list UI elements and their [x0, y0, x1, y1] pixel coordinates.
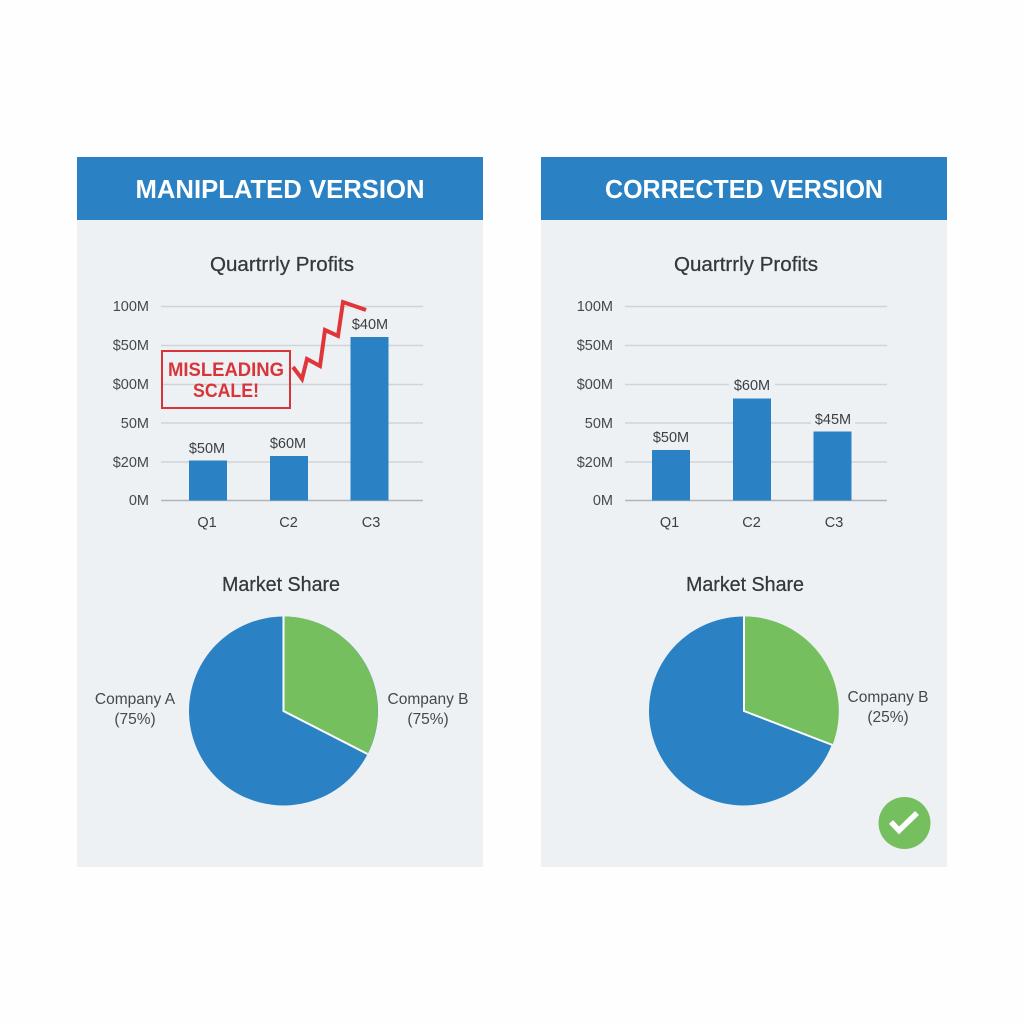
label: company b right: (25%) [867, 709, 909, 726]
bar chart: corrected: $45M [815, 412, 851, 428]
bar chart: manipulated: Q1 [197, 515, 217, 531]
bar chart: manipulated: 100M [113, 299, 149, 315]
bar chart: corrected: Q1 [660, 515, 679, 531]
panel: corrected version [541, 157, 947, 867]
bar chart: corrected [577, 299, 887, 531]
bar chart: manipulated: C3 [362, 515, 380, 531]
chart title: market share right: Market Share [686, 574, 804, 596]
bar chart: manipulated: $40M [352, 317, 388, 333]
bar chart: corrected: 100M [577, 299, 613, 315]
bar chart: corrected: 0M [593, 493, 613, 509]
icon: check mark [878, 797, 930, 849]
bar chart: corrected: 50M [585, 416, 613, 432]
bar chart: corrected: $00M [577, 377, 613, 393]
bar chart: manipulated: $00M [113, 377, 149, 393]
bar chart: corrected: C2 [742, 515, 761, 531]
callout: misleading scale: MISLEADING [168, 360, 284, 381]
bar chart: manipulated: 50M [121, 416, 149, 432]
arrow: jagged red line [293, 302, 366, 379]
panel: manipulated version [77, 157, 483, 867]
bar chart: corrected: $50M [577, 338, 613, 354]
bar chart: corrected: C3 [825, 515, 843, 531]
header: corrected version [541, 157, 947, 220]
bar chart: manipulated: $50M [189, 441, 225, 457]
bar chart: manipulated: $50M [113, 338, 149, 354]
label: company a: (75%) [114, 711, 156, 728]
bar chart: manipulated [113, 299, 423, 531]
bar chart: corrected: $50M [653, 430, 689, 446]
bar chart: manipulated: C2 [279, 515, 298, 531]
bar chart: corrected: $60M [734, 378, 770, 394]
bar chart: corrected: $20M [577, 455, 613, 471]
bar chart: manipulated: $60M [270, 436, 306, 452]
label: company b left: Company B [388, 691, 468, 708]
label: company a: Company A [95, 691, 176, 708]
pie chart: manipulated [189, 616, 378, 806]
header: manipulated version: MANIPLATED VERSION [136, 174, 424, 204]
label: company b left: (75%) [407, 711, 449, 728]
pie chart: corrected [649, 616, 839, 806]
callout: misleading scale: SCALE! [193, 381, 259, 402]
chart title: market share left: Market Share [222, 574, 340, 596]
label: company b right: Company B [848, 689, 928, 706]
header: manipulated version [77, 157, 483, 220]
callout: misleading scale [162, 351, 290, 408]
bar chart: manipulated: $20M [113, 455, 149, 471]
chart title: quarterly profits right: Quartrrly Profits [674, 254, 818, 276]
chart title: quarterly profits left: Quartrrly Profits [210, 254, 354, 276]
bar chart: manipulated: 0M [129, 493, 149, 509]
header: corrected version: CORRECTED VERSION [605, 174, 883, 204]
